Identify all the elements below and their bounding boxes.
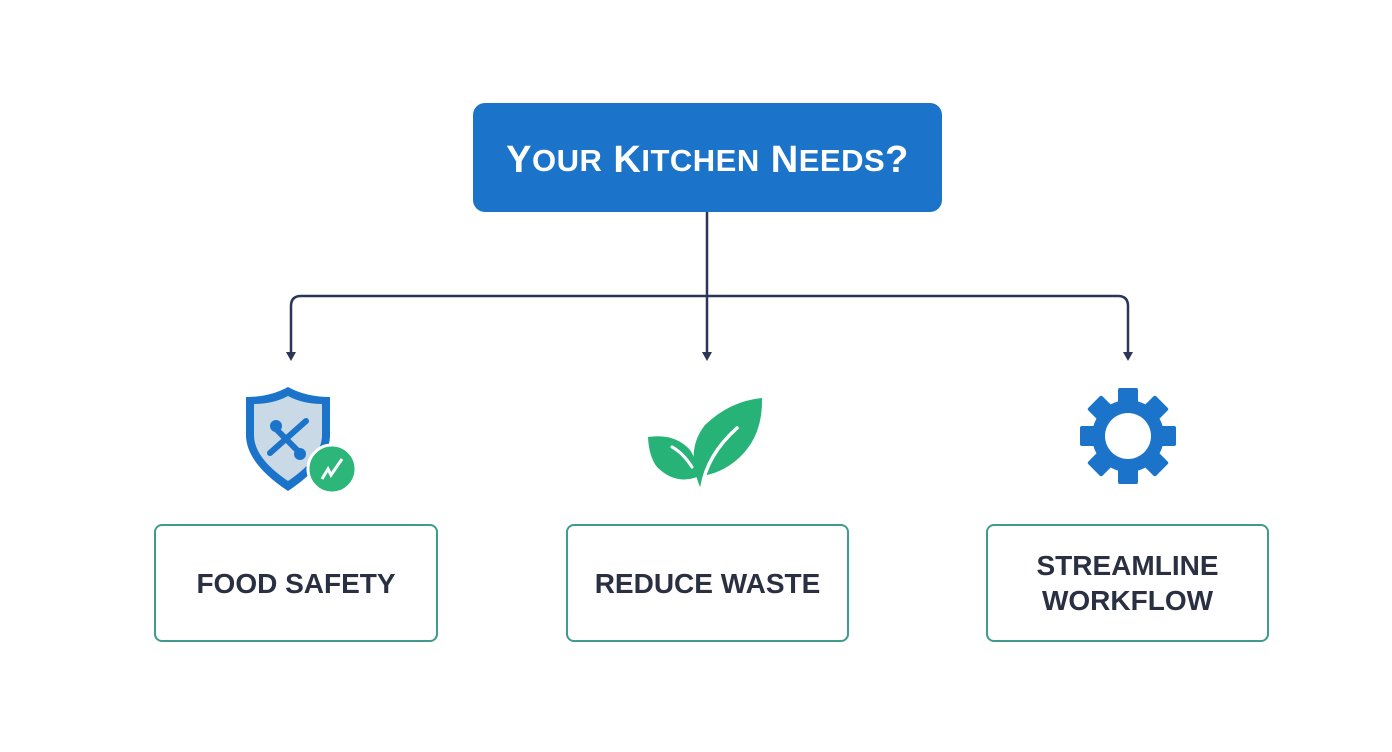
icon: shield <box>246 387 354 492</box>
box: reduce waste <box>566 524 849 642</box>
icon: gear <box>1080 388 1176 484</box>
title box: EEDS <box>799 142 885 178</box>
box: reduce waste: REDUCE WASTE <box>595 568 820 598</box>
title box: OUR <box>532 142 602 178</box>
icon: leaf <box>648 398 762 487</box>
title box <box>473 103 942 212</box>
box: streamline workflow <box>986 524 1269 642</box>
box: streamline workflow: STREAMLINE <box>1036 550 1218 581</box>
title box: Y K N ? <box>506 139 909 181</box>
box: streamline workflow: WORKFLOW <box>1042 585 1213 616</box>
title box: ITCHEN <box>641 142 760 178</box>
box: food safety: FOOD SAFETY <box>196 568 396 598</box>
box: food safety <box>154 524 438 642</box>
